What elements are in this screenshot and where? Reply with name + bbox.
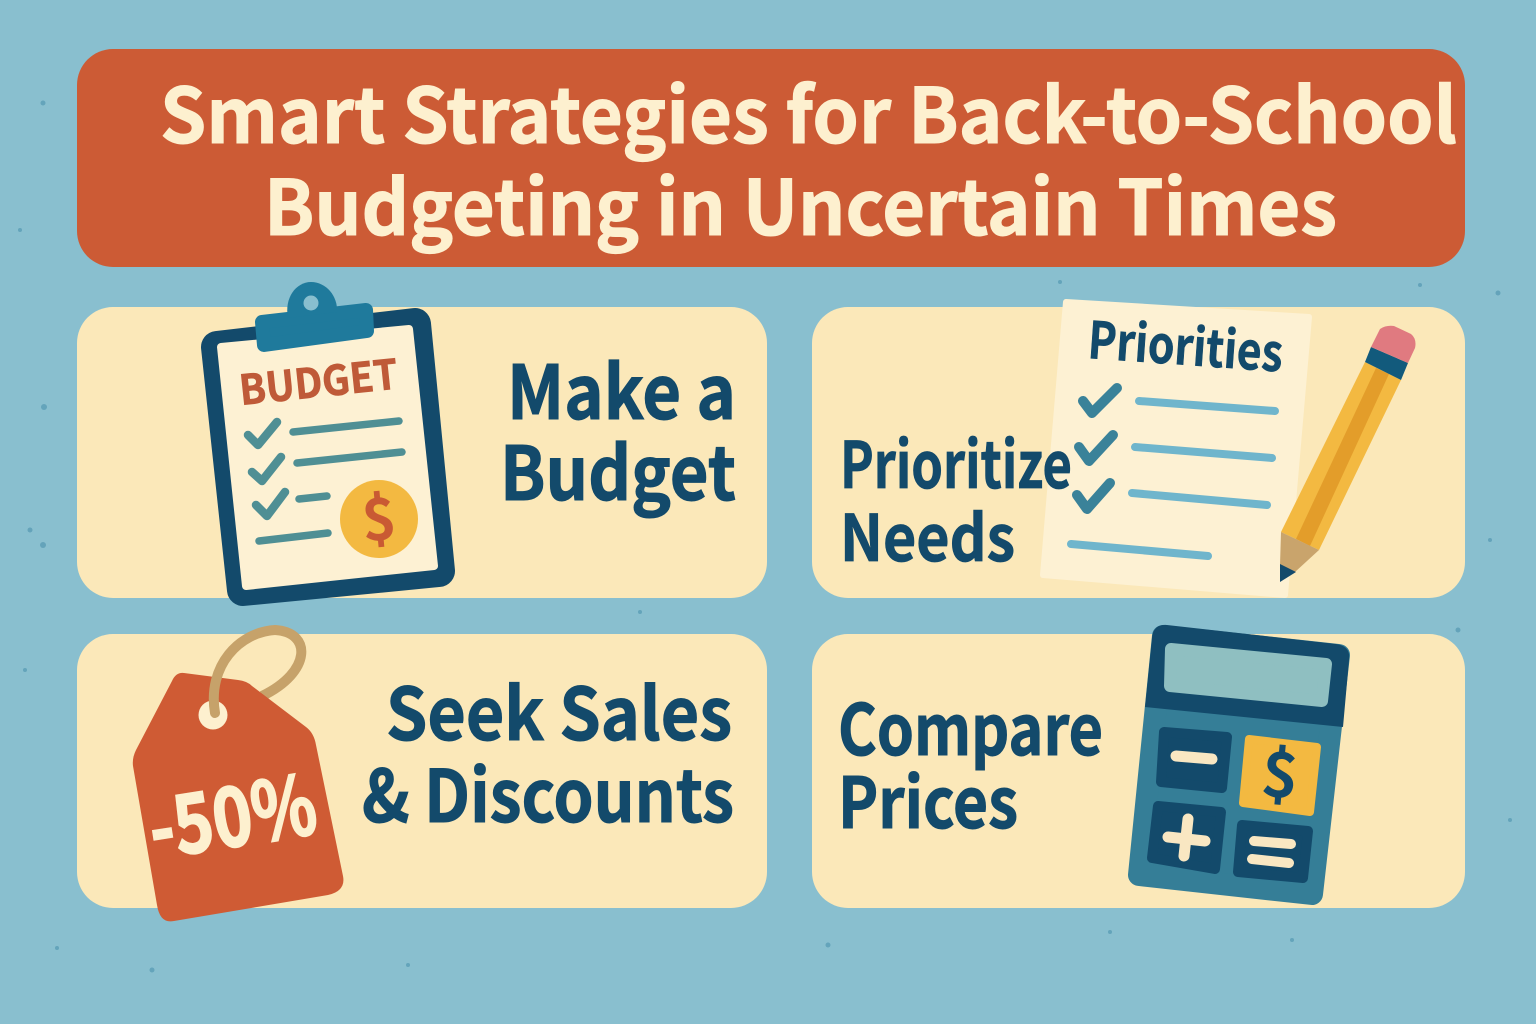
icon: calculator: $ [1258, 724, 1303, 816]
heading: compare prices: Compare [838, 675, 1103, 776]
icon: calculator [1139, 625, 1349, 894]
icon: priorities checklist [1043, 299, 1309, 595]
panel: seek sales and discounts [77, 630, 767, 921]
heading: compare prices: Prices [838, 748, 1018, 849]
heading: seek sales: Seek Sales [386, 656, 732, 761]
heading: compare prices [838, 675, 1103, 849]
heading: seek sales: & Discounts [362, 738, 734, 843]
icon: clipboard: BUDGET [236, 341, 400, 417]
heading: make a budget [500, 334, 736, 522]
title [160, 55, 1457, 257]
icon: clipboard [217, 282, 439, 590]
icon: price tag: -50% [139, 739, 324, 883]
panel: compare prices [812, 625, 1465, 908]
panel: prioritize needs [812, 299, 1465, 598]
icon: price tag [133, 630, 343, 921]
heading: prioritize needs [840, 415, 1072, 580]
heading: seek sales [362, 656, 734, 843]
icon: pencil [1280, 326, 1416, 582]
title: Smart Strategies for Back-to-School [160, 55, 1457, 165]
icon: priorities checklist: Priorities [1086, 299, 1286, 387]
panel: make a budget [77, 282, 767, 598]
heading: make a budget: Budget [500, 415, 736, 522]
icon: clipboard: $ [358, 472, 399, 558]
title banner [77, 49, 1465, 267]
title: Budgeting in Uncertain Times [264, 147, 1337, 257]
heading: make a budget: Make a [507, 334, 736, 441]
heading: prioritize needs: Prioritize [840, 415, 1072, 507]
heading: prioritize needs: Needs [840, 488, 1015, 580]
